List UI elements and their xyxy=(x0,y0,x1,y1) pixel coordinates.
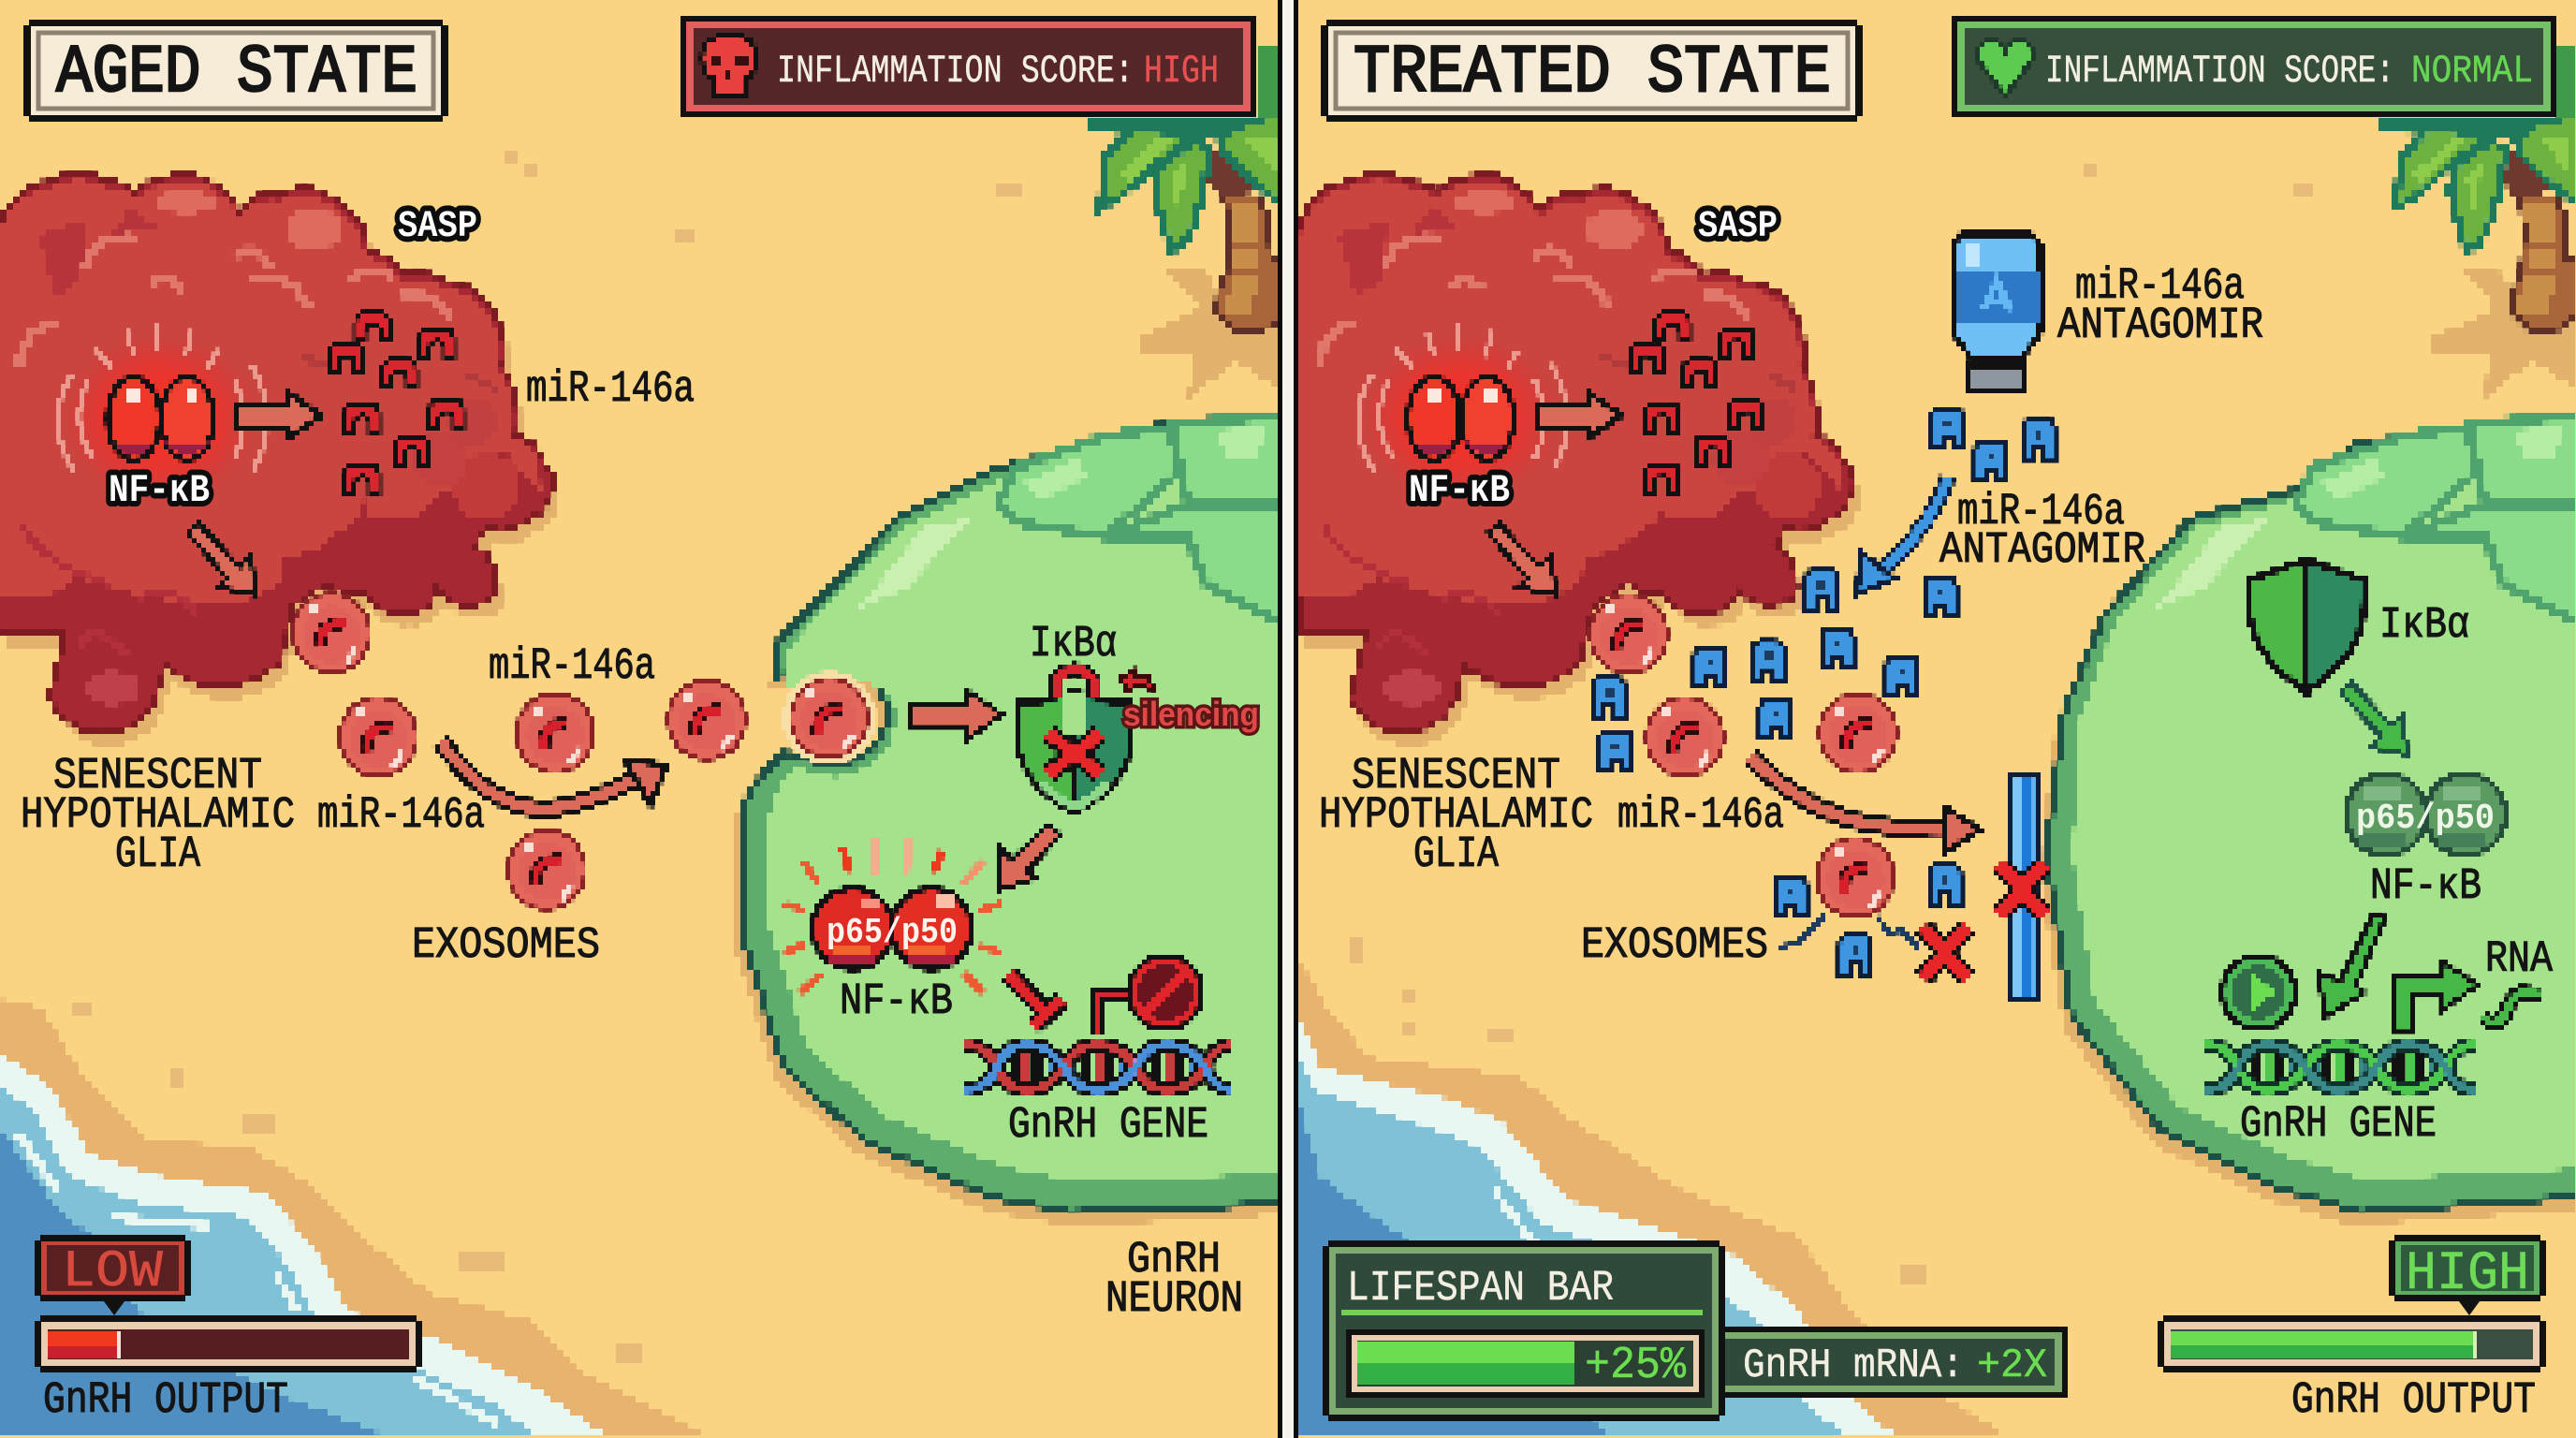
label: p65/p50 right: p65/p50 xyxy=(2356,799,2495,839)
arrow: shield to NF-kB xyxy=(999,824,1061,889)
label: senescent hypothalamic glia: HYPOTHALAMIC xyxy=(21,791,295,841)
red X on barrier xyxy=(2000,864,2043,915)
label: silencing: silencing xyxy=(1123,695,1259,733)
badge: high: HIGH xyxy=(2406,1244,2529,1305)
RNA strand xyxy=(2483,992,2541,1022)
arrow into neuron xyxy=(912,691,1002,740)
inflammation score: normal xyxy=(1952,16,2556,117)
senescent glia right xyxy=(1300,173,1860,746)
label: RNA: RNA xyxy=(2485,935,2554,985)
miR-146a cluster right xyxy=(1630,313,1764,492)
icon: heart xyxy=(1978,40,2032,95)
title: treated state xyxy=(1321,20,1863,122)
icon: skull xyxy=(702,36,756,95)
red X on exosome path xyxy=(1924,927,1967,978)
membrane receptor barrier xyxy=(2011,776,2037,1001)
label: SASP right: SASP xyxy=(1698,206,1778,248)
bar: GnRH output high xyxy=(2158,1315,2546,1372)
label: GnRH gene: GnRH GENE xyxy=(1008,1101,1208,1151)
panel: aged state xyxy=(0,0,1292,1438)
label: arrow antagomir: miR-146a xyxy=(1957,488,2125,537)
callout: GnRH mRNA +2X: GnRH mRNA: xyxy=(1743,1343,1964,1389)
panel: treated state xyxy=(1298,0,2576,1438)
label: miR-146a cluster: miR-146a xyxy=(526,365,695,415)
shoreline left xyxy=(0,999,710,1438)
green arrow: to gene xyxy=(2320,916,2385,1018)
arrow: NF-kB to exosome xyxy=(188,523,256,594)
GnRH DNA silenced xyxy=(964,1045,1233,1090)
label: GnRH output: GnRH OUTPUT xyxy=(43,1376,288,1426)
badge: low xyxy=(35,1235,191,1315)
panel: lifespan bar: +25% xyxy=(1585,1341,1686,1391)
label: miR-146a lower: miR-146a xyxy=(317,791,485,841)
inflammation score: high: HIGH xyxy=(1144,49,1219,94)
arrow: NF-kB to miRNA xyxy=(237,392,321,438)
label: vial antagomir: miR-146a xyxy=(2075,262,2245,312)
badge: high xyxy=(2389,1235,2546,1315)
label: IkBa right: IκBα xyxy=(2379,601,2469,651)
label: vial antagomir xyxy=(2057,262,2263,351)
label: vial antagomir: ANTAGOMIR xyxy=(2057,301,2263,351)
NF-kB dimer in glia xyxy=(58,323,268,503)
IkBa shield intact xyxy=(2248,560,2364,691)
title: treated state: TREATED STATE xyxy=(1354,35,1831,111)
label: senescent hypothalamic glia right: GLIA xyxy=(1413,830,1500,880)
label: NF-kB in glia right: NF-κB xyxy=(1409,468,1510,513)
label: arrow antagomir xyxy=(1939,488,2145,576)
label: exosomes right: EXOSOMES xyxy=(1581,921,1768,971)
GnRH neuron right xyxy=(2039,415,2576,1225)
antagomir molecules xyxy=(1593,409,2055,975)
shoreline right xyxy=(1298,958,2010,1438)
label: SASP: SASP xyxy=(398,206,477,248)
transcription arrow xyxy=(2394,962,2478,1030)
callout: GnRH mRNA +2X xyxy=(1725,1327,2068,1398)
icons left xyxy=(58,313,1233,1090)
label: senescent hypothalamic glia right: HYPOTHALAMIC xyxy=(1319,791,1593,841)
label: miR-146a upper: miR-146a xyxy=(489,642,655,692)
label: miR-146a right: miR-146a xyxy=(1617,791,1784,841)
scenery right xyxy=(1298,49,2576,1438)
senescent glia left xyxy=(0,173,560,746)
curved arrow between exosomes xyxy=(441,741,666,809)
curved arrow blocked at membrane xyxy=(1750,756,1980,853)
badge: low: LOW xyxy=(62,1241,163,1301)
label: senescent hypothalamic glia xyxy=(21,752,295,880)
label: arrow antagomir: ANTAGOMIR xyxy=(1939,526,2145,576)
sand specks xyxy=(73,153,1023,1366)
inflammation score: normal: INFLAMMATION SCORE: xyxy=(2045,49,2394,94)
NF-kB dimer in glia right xyxy=(1358,323,1568,503)
palm tree left xyxy=(1086,49,1292,399)
label: GnRH output right: GnRH OUTPUT xyxy=(2291,1376,2536,1426)
label: GnRH neuron: GnRH xyxy=(1127,1236,1221,1285)
panel: lifespan bar xyxy=(1323,1240,1725,1421)
divider between panels xyxy=(1278,0,1298,1438)
label: GnRH neuron: NEURON xyxy=(1105,1275,1243,1325)
inflammation score: high: INFLAMMATION SCORE: xyxy=(777,49,1134,94)
exosomes right xyxy=(1588,593,1898,918)
label: NF-kB: NF-κB xyxy=(840,977,953,1027)
inhibition T-bar xyxy=(1008,974,1062,1027)
panel: lifespan bar: LIFESPAN BAR xyxy=(1347,1265,1614,1313)
arrow: NF-kB to miRNA right xyxy=(1537,392,1621,438)
title: aged state: AGED STATE xyxy=(56,35,417,111)
inactive p65/p50 dimer xyxy=(2346,774,2506,855)
green arrow: shield to NF-kB xyxy=(2340,683,2408,755)
play icon xyxy=(2222,956,2295,1029)
active p65/p50 dimer with rays xyxy=(784,840,1002,992)
label: senescent hypothalamic glia: SENESCENT xyxy=(53,752,262,801)
GnRH DNA active xyxy=(2205,1045,2474,1090)
silenced IkBa shield xyxy=(1017,669,1132,813)
inflammation score: high xyxy=(681,16,1256,117)
exosomes xyxy=(291,592,876,911)
small curl above silencing xyxy=(1120,670,1153,691)
blue arrow: antagomir delivery xyxy=(1857,477,1948,594)
scenery: beach, palm, glia and neuron xyxy=(0,49,1292,1438)
label: senescent hypothalamic glia: GLIA xyxy=(115,830,201,880)
exosome leader and squiggle xyxy=(1777,915,1919,948)
palm tree right xyxy=(2381,49,2576,399)
label: NF-kB right: NF-κB xyxy=(2370,862,2481,912)
sand specks right xyxy=(1353,164,2313,1286)
inflammation score: normal: NORMAL xyxy=(2411,49,2533,94)
antagomir vial xyxy=(1953,234,2041,389)
blocked promoter xyxy=(1098,958,1200,1033)
miR-146a cluster xyxy=(329,313,463,492)
label: GnRH neuron xyxy=(1105,1236,1243,1325)
label: NF-kB in glia: NF-κB xyxy=(109,468,210,513)
label: IkBa: IκBα xyxy=(1030,620,1117,669)
label: exosomes: EXOSOMES xyxy=(412,921,600,971)
label: GnRH gene right: GnRH GENE xyxy=(2240,1100,2437,1150)
GnRH neuron left xyxy=(735,415,1292,1225)
icons right xyxy=(1358,234,2541,1090)
arrow: NF-kB to exosome right xyxy=(1488,523,1556,594)
callout: GnRH mRNA +2X: +2X xyxy=(1977,1343,2047,1389)
label: p65/p50: p65/p50 xyxy=(827,913,958,953)
bar: GnRH output low xyxy=(35,1315,422,1372)
title: aged state xyxy=(23,20,448,122)
label: senescent hypothalamic glia right: SENESCENT xyxy=(1352,752,1560,801)
label: senescent hypothalamic glia right xyxy=(1319,752,1593,880)
